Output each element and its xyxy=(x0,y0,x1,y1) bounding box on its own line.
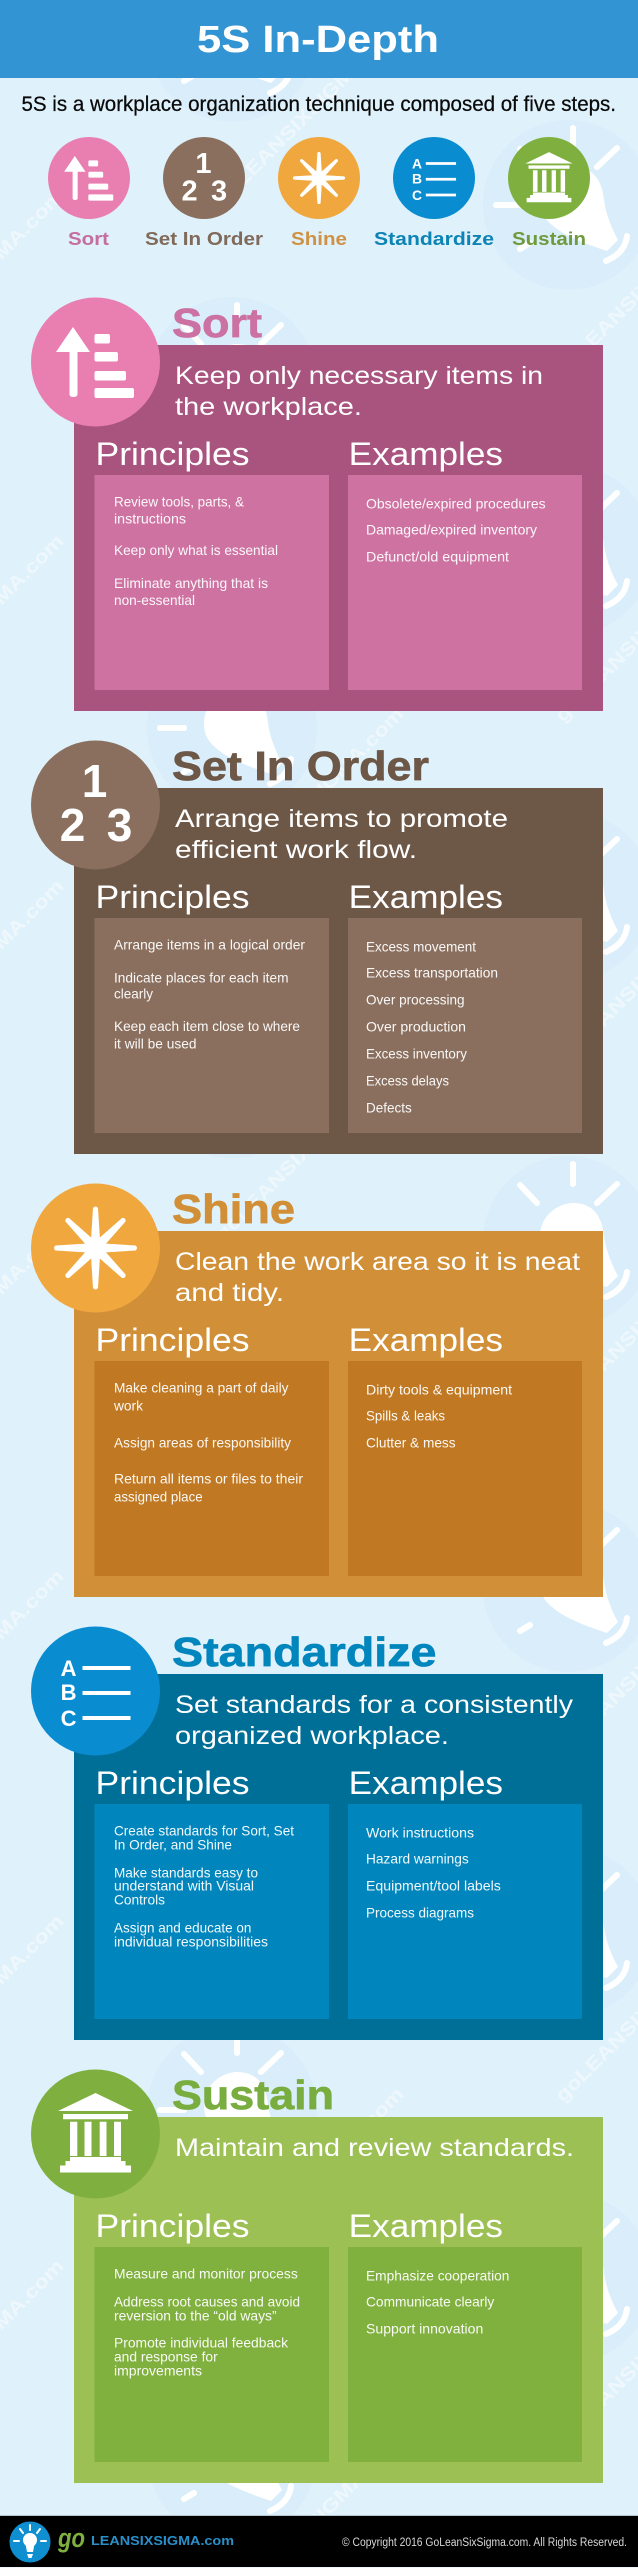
principles column xyxy=(94,436,329,690)
overview: Standardize: A xyxy=(412,156,422,172)
principles column: individual responsibilities xyxy=(114,1933,268,1949)
icon: 1 2 3: 2 xyxy=(60,799,85,851)
heading: Shine: Shine xyxy=(172,1186,295,1232)
description xyxy=(175,362,543,421)
principles column: Keep each item close to where xyxy=(114,1018,300,1034)
logo wordmark: go xyxy=(57,2523,85,2553)
description xyxy=(175,805,508,864)
principles column: Arrange items in a logical order xyxy=(114,936,305,952)
examples column: Equipment/tool labels xyxy=(366,1877,501,1893)
watermarks: goLEANSIXSIGMA.com xyxy=(212,1394,408,1591)
examples column xyxy=(348,1765,582,2019)
principles column: In Order, and Shine xyxy=(114,1836,232,1852)
principles column: Make standards easy to xyxy=(114,1864,258,1880)
panel: Shine xyxy=(31,1184,603,1597)
logo wordmark xyxy=(57,2523,234,2553)
examples column: Communicate clearly xyxy=(366,2293,494,2309)
icon: 1 2 3 xyxy=(31,740,160,870)
examples column: Excess delays xyxy=(366,1072,449,1088)
icon: pillars xyxy=(31,2070,160,2198)
description xyxy=(175,1691,574,1750)
examples column: Over production xyxy=(366,1018,466,1034)
title banner: 5S In-Depth xyxy=(197,19,439,61)
examples column: Defunct/old equipment xyxy=(366,549,509,565)
examples column: Examples xyxy=(349,2208,503,2244)
icon: ABC list xyxy=(31,1626,160,1756)
principles column: Assign areas of responsibility xyxy=(114,1434,291,1450)
principles column: Create standards for Sort, Set xyxy=(114,1823,294,1839)
overview: Sort: Sort xyxy=(68,228,109,249)
overview: Sustain: Sustain xyxy=(512,228,586,249)
principles column: Eliminate anything that is xyxy=(114,575,268,591)
icon: sort arrow xyxy=(31,298,160,426)
principles column: Return all items or files to their xyxy=(114,1470,303,1486)
principles column: instructions xyxy=(114,510,186,526)
icon: logo bulb xyxy=(10,2522,50,2562)
heading: Standardize: Standardize xyxy=(172,1629,436,1675)
heading: Set In Order: Set In Order xyxy=(172,743,429,789)
principles column: Assign and educate on xyxy=(114,1919,251,1935)
description: the workplace. xyxy=(175,393,362,421)
examples column: Examples xyxy=(349,1765,503,1801)
watermarks: goLEANSIXSIGMA.com xyxy=(212,2084,408,2281)
principles column: Measure and monitor process xyxy=(114,2265,298,2281)
heading: Sort: Sort xyxy=(172,300,262,346)
principles column: non-essential xyxy=(114,592,195,608)
icon: 1 2 3: 1 xyxy=(82,755,107,807)
overview: Set In Order: 3 xyxy=(211,176,227,208)
description: Clean the work area so it is neat xyxy=(175,1248,580,1276)
examples column: Emphasize cooperation xyxy=(366,2267,509,2283)
overview: Set In Order: Set In Order xyxy=(145,228,263,249)
overview: Standardize: C xyxy=(412,187,422,203)
logo wordmark: LEANSIXSIGMA.com xyxy=(91,2533,234,2548)
icon: ABC list: C xyxy=(61,1706,77,1731)
principles column: Principles xyxy=(96,1765,250,1801)
principles column: Review tools, parts, & xyxy=(114,494,245,510)
principles column: Keep only what is essential xyxy=(114,542,278,558)
principles column: Principles xyxy=(96,1322,250,1358)
watermarks: goLEANSIXSIGMA.com xyxy=(212,1049,408,1246)
principles column: assigned place xyxy=(114,1488,203,1504)
principles column: Principles xyxy=(96,436,250,472)
examples column xyxy=(348,1322,582,1576)
overview: Set In Order: 2 xyxy=(181,176,198,208)
overview icons row xyxy=(48,137,590,249)
principles column xyxy=(94,2208,329,2462)
examples column: Examples xyxy=(349,1322,503,1358)
panel: Sort xyxy=(31,298,603,711)
principles column: clearly xyxy=(114,985,153,1001)
overview: Sustain xyxy=(508,137,590,249)
overview: Shine xyxy=(278,137,360,249)
examples column: Spills & leaks xyxy=(366,1407,445,1423)
description: Arrange items to promote xyxy=(175,805,508,833)
principles column: Promote individual feedback xyxy=(114,2334,289,2350)
watermarks: goLEANSIXSIGMA.com xyxy=(212,14,408,211)
title banner xyxy=(0,0,638,78)
overview: Sort xyxy=(48,137,130,249)
overview: Standardize xyxy=(374,137,494,249)
icon: ABC list: B xyxy=(61,1680,76,1705)
panel: Standardize xyxy=(31,1626,603,2040)
examples column: Defects xyxy=(366,1099,412,1115)
principles column: work xyxy=(113,1397,144,1413)
examples column xyxy=(348,2208,582,2462)
principles column: and response for xyxy=(114,2348,218,2364)
watermarks: goLEANSIXSIGMA.com xyxy=(212,704,408,901)
icon: ABC list: A xyxy=(61,1656,77,1681)
description: and tidy. xyxy=(175,1279,284,1307)
overview: Set In Order: 1 xyxy=(195,148,211,180)
overview: Standardize: B xyxy=(412,171,422,187)
principles column xyxy=(94,879,329,1133)
principles column: Controls xyxy=(114,1891,165,1907)
examples column: Hazard warnings xyxy=(366,1850,469,1866)
panel: Sustain xyxy=(31,2070,603,2483)
examples column: Examples xyxy=(349,879,503,915)
footer xyxy=(0,2515,638,2568)
description: Keep only necessary items in xyxy=(175,362,543,390)
examples column xyxy=(348,436,582,690)
description: Maintain and review standards. xyxy=(175,2134,574,2162)
principles column xyxy=(94,1765,329,2019)
principles column: Principles xyxy=(96,879,250,915)
principles column: Principles xyxy=(96,2208,250,2244)
principles column: improvements xyxy=(114,2362,202,2378)
examples column: Examples xyxy=(349,436,503,472)
panel: Set In Order xyxy=(31,740,603,1154)
examples column: Work instructions xyxy=(366,1824,474,1840)
principles column: it will be used xyxy=(114,1035,196,1051)
heading: Sustain: Sustain xyxy=(172,2072,334,2118)
principles column: reversion to the “old ways” xyxy=(114,2307,277,2323)
intro text: 5S is a workplace organization technique composed of five steps. xyxy=(22,93,616,116)
watermarks: goLEANSIXSIGMA.com xyxy=(212,1739,408,1936)
principles column: understand with Visual xyxy=(114,1877,254,1893)
overview: Standardize: Standardize xyxy=(374,228,494,249)
icon: star xyxy=(31,1184,160,1312)
overview: Set In Order xyxy=(145,137,263,249)
principles column: Make cleaning a part of daily xyxy=(114,1379,288,1395)
examples column: Excess inventory xyxy=(366,1045,467,1061)
description xyxy=(175,1248,580,1307)
examples column: Dirty tools & equipment xyxy=(366,1381,512,1397)
principles column: Indicate places for each item xyxy=(114,969,288,985)
examples column: Over processing xyxy=(366,991,465,1007)
principles column xyxy=(94,1322,329,1576)
examples column: Support innovation xyxy=(366,2320,483,2336)
watermarks: goLEANSIXSIGMA.com xyxy=(212,359,408,556)
description: Set standards for a consistently xyxy=(175,1691,574,1719)
description: organized workplace. xyxy=(175,1722,449,1750)
examples column: Clutter & mess xyxy=(366,1434,456,1450)
examples column xyxy=(348,879,582,1133)
description: efficient work flow. xyxy=(175,836,417,864)
principles column: Address root causes and avoid xyxy=(114,2293,300,2309)
examples column: Process diagrams xyxy=(366,1904,474,1920)
examples column: Excess transportation xyxy=(366,965,498,981)
examples column: Damaged/expired inventory xyxy=(366,521,537,537)
examples column: Excess movement xyxy=(366,939,476,955)
overview: Shine: Shine xyxy=(291,228,347,249)
examples column: Obsolete/expired procedures xyxy=(366,495,546,511)
icon: 1 2 3: 3 xyxy=(107,799,132,851)
